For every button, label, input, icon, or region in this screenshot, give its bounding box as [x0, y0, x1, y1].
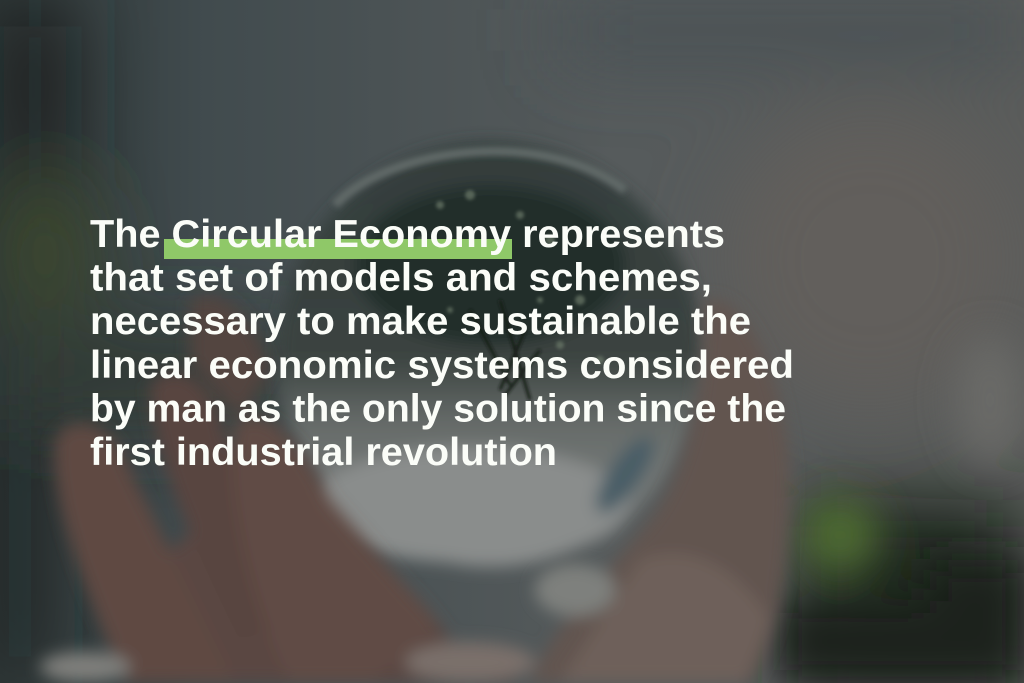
- tree reflection in the ball: [417, 190, 604, 400]
- headline text: linear economic systems considered: [90, 344, 794, 387]
- glass ball: [278, 143, 702, 567]
- highlight bar behind Circular Economy: [164, 239, 512, 259]
- hand: [40, 296, 790, 683]
- headline text: first industrial revolution: [90, 431, 557, 474]
- headline text: necessary to make sustainable the: [90, 300, 751, 343]
- headline text: The Circular Economy represents: [90, 213, 725, 256]
- headline text: that set of models and schemes,: [90, 256, 712, 300]
- headline text: by man as the only solution since the: [90, 388, 786, 430]
- headline text: [90, 213, 794, 474]
